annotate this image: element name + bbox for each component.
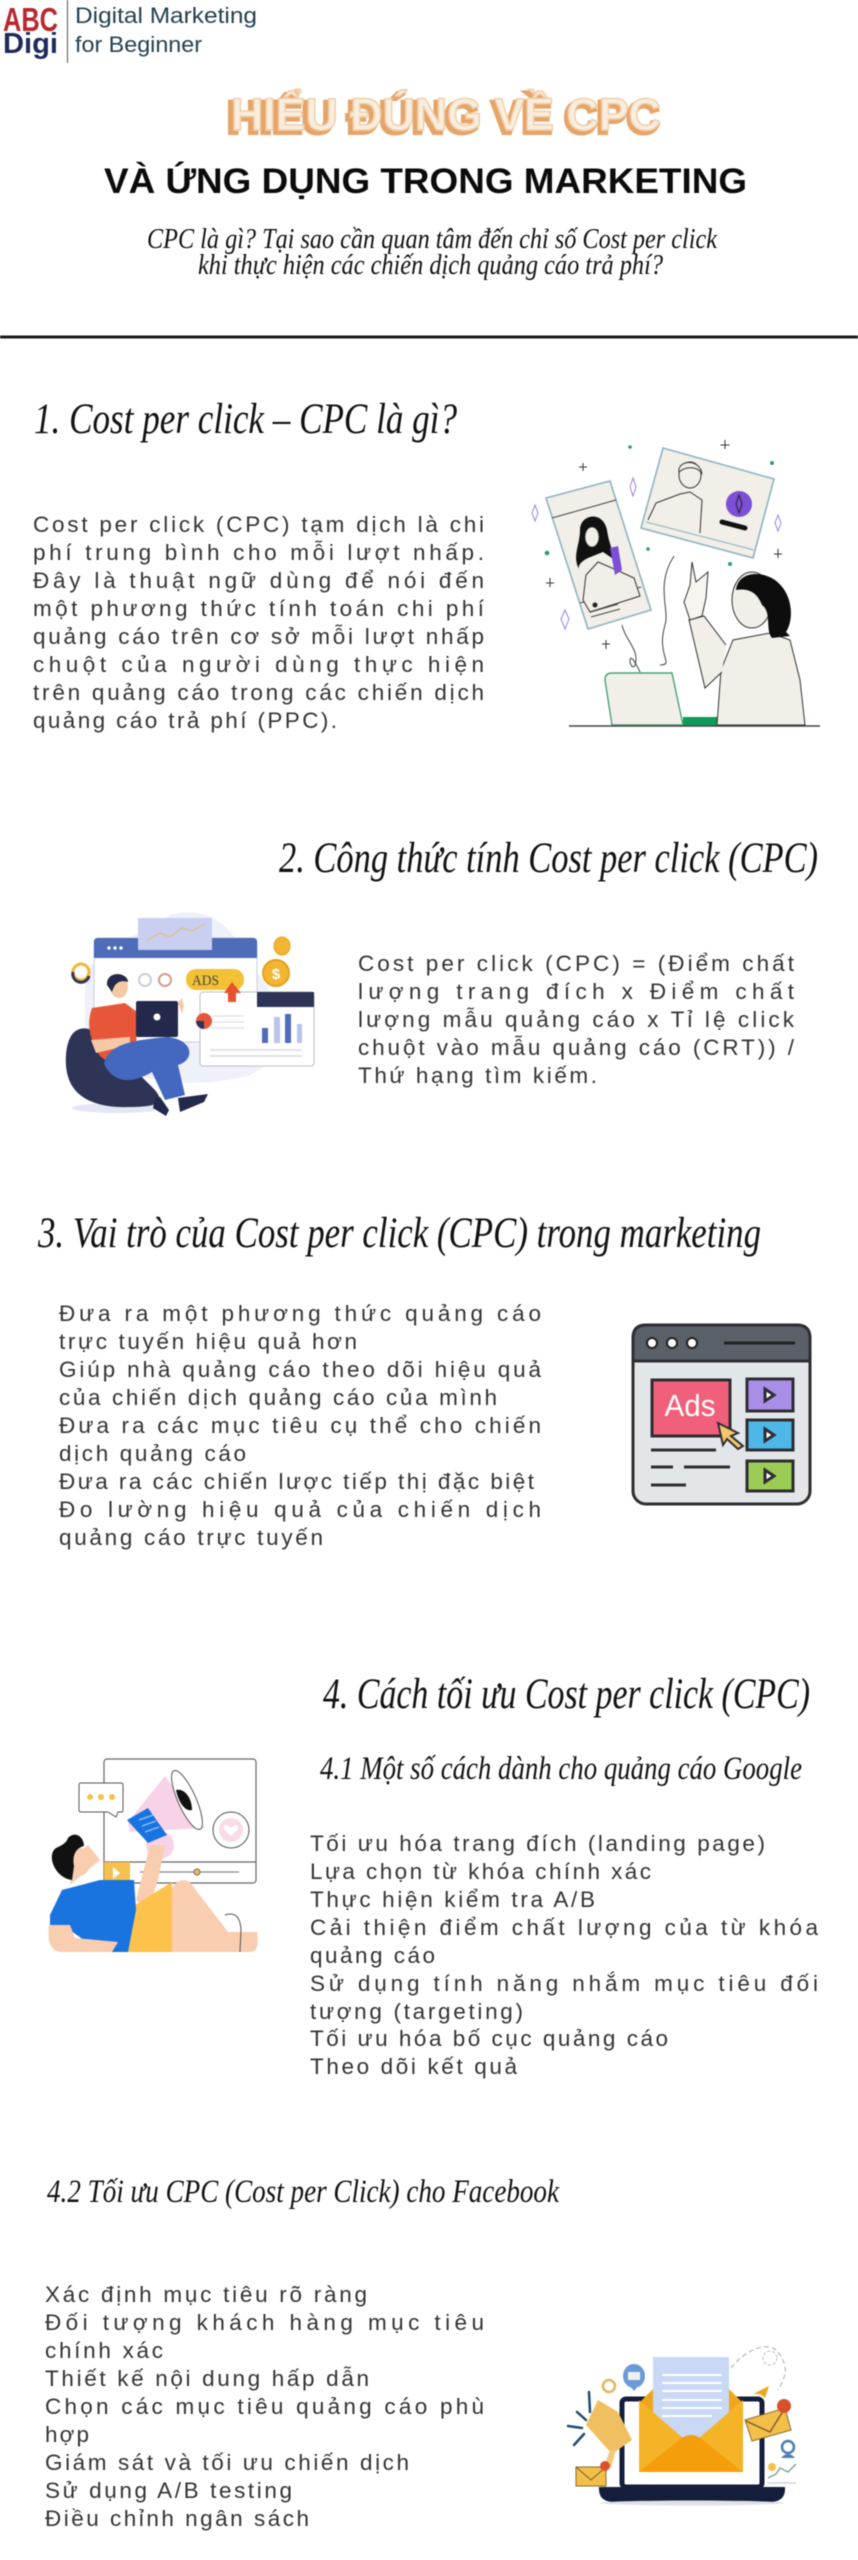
title: hiểu đúng về cpc: HIỂU ĐÚNG VỀ CPC xyxy=(227,92,659,143)
logo: ABC xyxy=(3,1,58,38)
section 1 text xyxy=(33,512,485,733)
section 3 text: của chiến dịch quảng cáo của mình xyxy=(59,1385,497,1410)
section 4.2 text: Xác định mục tiêu rõ ràng xyxy=(45,2282,367,2307)
section 4.1 text: Tối ưu hóa bố cục quảng cáo xyxy=(310,2026,668,2051)
section 1 text: trên quảng cáo trong các chiến dịch xyxy=(33,680,484,705)
icon: chart tile xyxy=(94,918,257,1042)
logo: for Beginner xyxy=(75,32,202,57)
icon: bar chart window xyxy=(200,992,314,1066)
heart bubble xyxy=(213,1812,249,1848)
video window xyxy=(104,1759,256,1883)
section 1 text: phí trung bình cho mỗi lượt nhấp. xyxy=(33,540,484,565)
megaphone xyxy=(127,1767,208,1859)
section 4.1 text: Thực hiện kiểm tra A/B xyxy=(310,1887,595,1912)
background blob xyxy=(85,912,280,1083)
section 4.1 text: Lựa chọn từ khóa chính xác xyxy=(310,1859,651,1884)
icon: dashboard rings xyxy=(73,964,244,1029)
illustration: email on laptop xyxy=(568,2347,796,2506)
dashed plane path xyxy=(731,2347,785,2398)
icon: left photo card xyxy=(546,481,651,629)
intro question: CPC là gì? Tại sao cần quan tâm đến chỉ số Cost per click xyxy=(147,223,718,255)
play buttons xyxy=(747,1379,793,1491)
title: hiểu đúng về cpc: HIỂU ĐÚNG VỀ CPC xyxy=(231,89,661,140)
icon: man on beanbag xyxy=(66,974,208,1116)
section 4.1 text: Tối ưu hóa trang đích (landing page) xyxy=(310,1831,765,1856)
person xyxy=(48,1835,258,1952)
section 4.1 text: Theo dõi kết quả xyxy=(310,2054,517,2079)
section 4.2 text: hợp xyxy=(45,2422,89,2447)
subtitle heading: VÀ ỨNG DỤNG TRONG MARKETING xyxy=(104,161,747,201)
section 4.2 text: Giám sát và tối ưu chiến dịch xyxy=(45,2450,409,2475)
section 1 heading: 1. Cost per click – CPC là gì? xyxy=(34,396,457,443)
section 1 text: quảng cáo trả phí (PPC). xyxy=(33,708,337,733)
illustration: person with megaphone xyxy=(48,1759,258,1952)
section 2 text xyxy=(358,951,795,1088)
laptop xyxy=(599,2399,785,2506)
section 1 text: chuột của người dùng thực hiện xyxy=(33,652,484,677)
section 4.1 text: Sử dụng tính năng nhắm mục tiêu đối xyxy=(310,1971,818,1996)
icon: woman xyxy=(684,562,805,725)
icon: coins xyxy=(263,937,290,986)
icon: sparkles and dots xyxy=(532,440,782,672)
section 4.2 text: Sử dụng A/B testing xyxy=(45,2478,292,2503)
icon: right video card xyxy=(641,448,774,558)
section 3 text: trực tuyến hiệu quả hơn xyxy=(59,1329,357,1354)
ads banner xyxy=(652,1380,730,1436)
section 4.2 text: Đối tượng khách hàng mục tiêu xyxy=(45,2310,484,2335)
ads banner: Ads xyxy=(664,1388,716,1423)
illustration: man with laptop and ads dashboard xyxy=(66,912,314,1116)
section 3 text: Giúp nhà quảng cáo theo dõi hiệu quả xyxy=(59,1357,541,1382)
icon: coins: $ xyxy=(272,966,281,983)
megaphone xyxy=(568,2392,632,2468)
section 4.1 text xyxy=(310,1831,818,2079)
cursor xyxy=(718,1423,743,1449)
section 4.1 text: quảng cáo xyxy=(310,1943,435,1968)
illustration: woman pointing at social cards xyxy=(532,440,820,726)
section 4.2 text xyxy=(45,2282,484,2531)
section 4.1 text: tượng (targeting) xyxy=(310,1999,523,2024)
icon: ads button xyxy=(186,969,244,1002)
section 1 text: một phương thức tính toán chi phí xyxy=(33,596,485,621)
section 3 text: Đưa ra các mục tiêu cụ thể cho chiến xyxy=(59,1413,541,1438)
section 4.2 text: Thiết kế nội dung hấp dẫn xyxy=(45,2366,369,2391)
section 1 text: Cost per click (CPC) tạm dịch là chi xyxy=(33,512,484,537)
section 2 text: lượng mẫu quảng cáo x Tỉ lệ click xyxy=(358,1007,795,1032)
section 2 text: lượng trang đích x Điểm chất xyxy=(358,979,795,1004)
section 1 text: quảng cáo trên cơ sở mỗi lượt nhấp xyxy=(33,624,484,649)
logo: Digi xyxy=(3,28,58,60)
logo: Digital Marketing xyxy=(75,3,257,28)
logo xyxy=(3,0,257,63)
section 2 text: Thứ hạng tìm kiếm. xyxy=(358,1063,597,1088)
subsection 4.2 heading: 4.2 Tối ưu CPC (Cost per Click) cho Facebook xyxy=(47,2174,560,2210)
badges and chart xyxy=(603,2364,796,2483)
section 4.2 text: Điều chỉnh ngân sách xyxy=(45,2506,309,2531)
section 2 text: Cost per click (CPC) = (Điểm chất xyxy=(358,951,795,976)
icon: laptop xyxy=(569,673,820,726)
section 2 text: chuột vào mẫu quảng cáo (CRT)) / xyxy=(358,1035,795,1060)
envelope and letter xyxy=(639,2357,743,2472)
section 4.2 text: chính xác xyxy=(45,2338,163,2363)
section 1 text: Đây là thuật ngữ dùng để nói đến xyxy=(33,568,484,593)
section 3 text: Đưa ra các chiến lược tiếp thị đặc biệt xyxy=(59,1469,535,1494)
small envelopes xyxy=(576,2399,791,2486)
section 3 text: Đưa ra một phương thức quảng cáo xyxy=(59,1301,541,1326)
section 3 text xyxy=(59,1301,541,1550)
section 3 text: quảng cáo trực tuyến xyxy=(59,1525,323,1550)
icon: ads button: ADS xyxy=(192,973,219,989)
icon: ads browser window xyxy=(633,1325,810,1504)
intro question: khi thực hiện các chiến dịch quảng cáo trả phí? xyxy=(198,249,663,281)
section 3 text: dịch quảng cáo xyxy=(59,1441,246,1466)
section 4.1 text: Cải thiện điểm chất lượng của từ khóa xyxy=(310,1915,818,1940)
section 3 text: Đo lường hiệu quả của chiến dịch xyxy=(59,1497,541,1522)
intro question xyxy=(147,223,718,281)
section 4.2 text: Chọn các mục tiêu quảng cáo phù xyxy=(45,2394,484,2419)
chat bubble xyxy=(79,1783,123,1817)
